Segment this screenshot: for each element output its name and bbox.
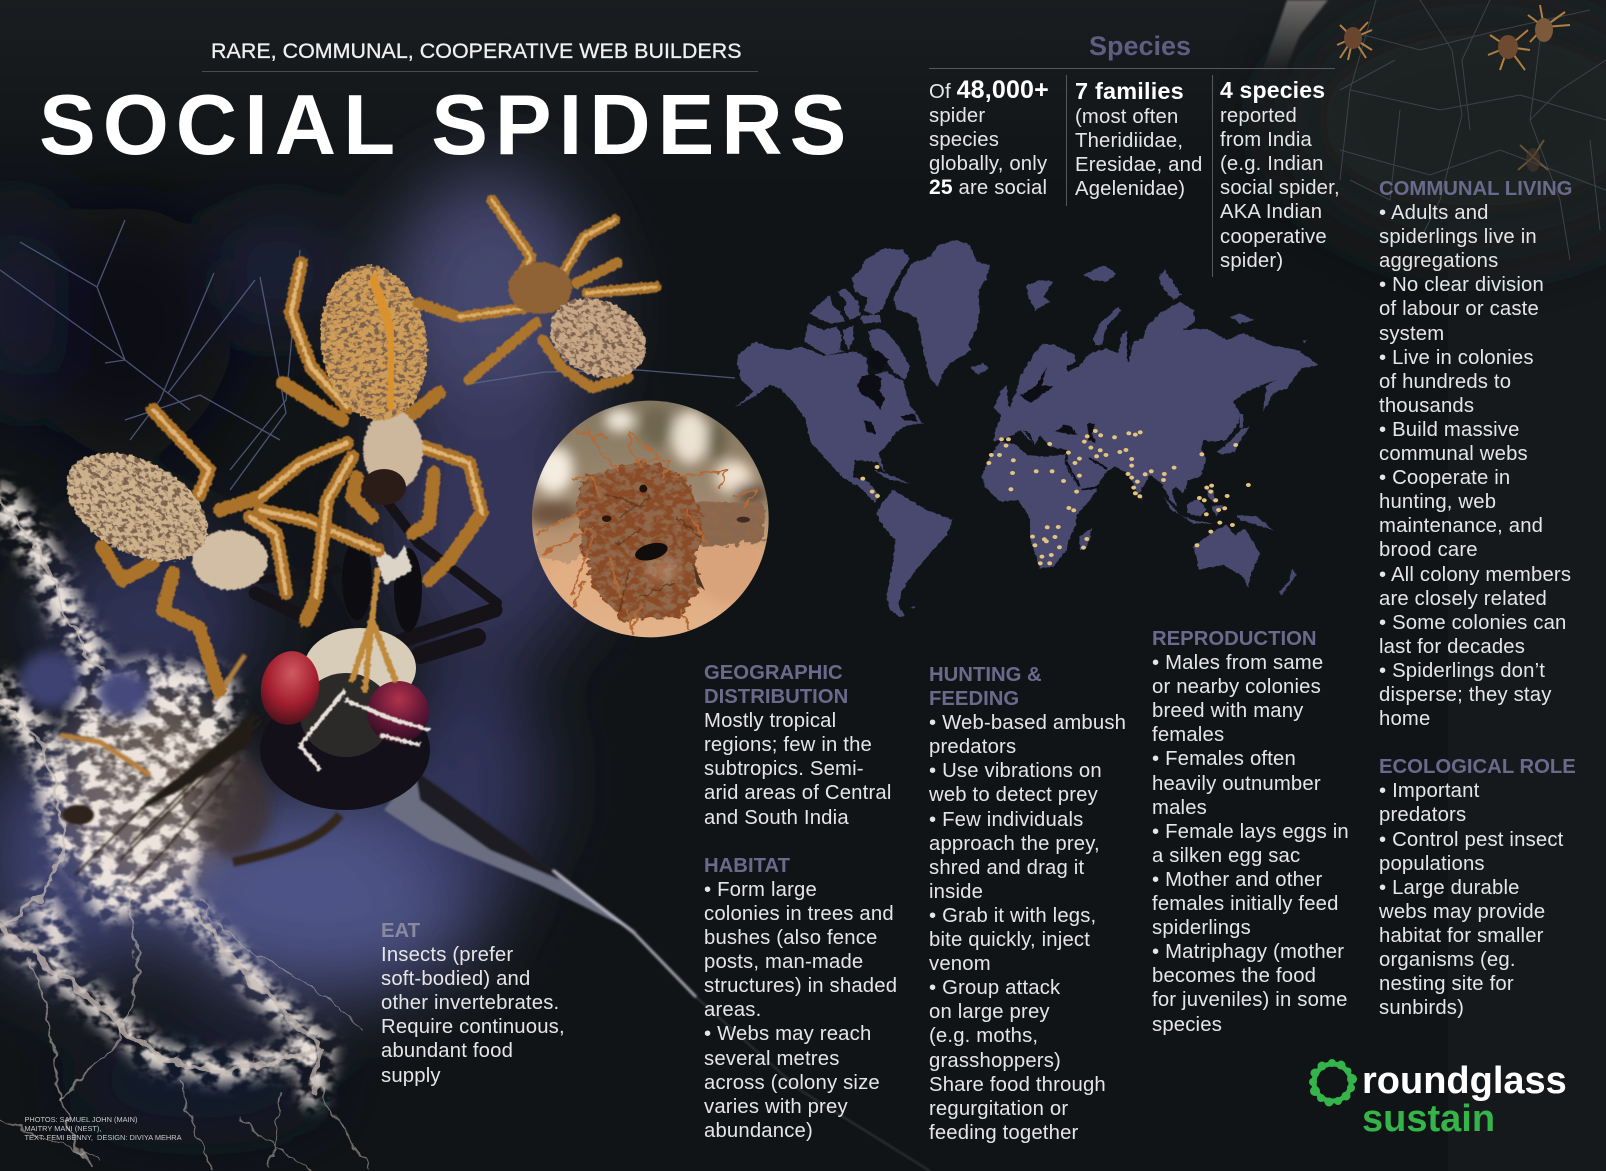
heading: geographic distribution: GEOGRAPHIC DISTRIBUTION <box>704 662 848 708</box>
web threads upper left <box>0 220 735 490</box>
text: global species count: Of 48,000+ spider species globally, only 25 are social <box>929 76 1049 199</box>
text: Indian species: 4 species reported from India (e.g. Indian social spider, AKA Indian cooperative spider) <box>1220 77 1340 272</box>
heading: ecological role: ECOLOGICAL ROLE <box>1379 756 1576 778</box>
panel: eat <box>381 920 565 1087</box>
logo: roundglass sustain <box>1309 1059 1567 1140</box>
text: eat: Insects (prefer soft-bodied) and other invertebrates. Require continuous, abundant food supply <box>381 944 565 1087</box>
heading: hunting and feeding: HUNTING & FEEDING <box>929 664 1042 710</box>
heading: habitat: HABITAT <box>704 855 790 877</box>
occurrence dots <box>860 429 1251 565</box>
heading: species: Species <box>1089 31 1191 61</box>
icon: green ring of dots <box>1309 1059 1357 1106</box>
text: reproduction: • Males from same or nearby colonies breed with many females • Females often heavily outnumber males • Female lays eggs in a silken egg sac • Mother and other females initially feed spiderlings • Matriphagy (mother becomes the food for juveniles) in some species <box>1152 652 1349 1036</box>
landmasses: Eurasia <box>994 265 1318 507</box>
top-right web and small spiders <box>1262 0 1606 260</box>
landmasses: southern continents and islands <box>860 442 1297 617</box>
heading: eat: EAT <box>381 920 420 942</box>
heading: reproduction: REPRODUCTION <box>1152 628 1317 650</box>
panel: communal living and ecological role <box>1379 178 1576 1019</box>
text: communal living: • Adults and spiderlings live in aggregations • No clear division of labour or caste system • Live in colonies of hundreds to thousands • Build massive communal webs • Cooperate in hunting, web maintenance, and brood care • All colony members are closely related • Some colonies can last for decades • Spiderlings don’t disperse; they stay home <box>1379 202 1571 730</box>
text: geographic distribution: Mostly tropical regions; few in the subtropics. Semi- arid areas of Central and South India <box>704 710 892 829</box>
panel: reproduction <box>1152 628 1349 1036</box>
landmasses: Americas and arctic <box>735 240 1012 503</box>
panel: species <box>929 31 1340 277</box>
text: ecological role: • Important predators • Control pest insect populations • Large durable webs may provide habitat for smaller organisms (eg. nesting site for sunbirds) <box>1379 780 1563 1019</box>
text: habitat: • Form large colonies in trees and bushes (also fence posts, man-made structures) in shaded areas. • Webs may reach several metres across (colony size varies with prey abundance) <box>704 879 897 1142</box>
web masses <box>65 690 235 890</box>
heading: communal living: COMMUNAL LIVING <box>1379 178 1572 200</box>
text: families: 7 families (most often Theridiidae, Eresidae, and Agelenidae) <box>1075 78 1202 200</box>
panel: hunting and feeding <box>929 664 1126 1144</box>
prey fly <box>75 503 930 1171</box>
text: hunting and feeding: • Web-based ambush predators • Use vibrations on web to detect prey • Few individuals approach the prey, shred and drag it inside • Grab it with legs, bite quickly, inject venom • Group attack on large prey (e.g. moths, grasshoppers) Share food through regurgitation or feeding together <box>929 712 1126 1144</box>
upper right spider <box>418 200 659 393</box>
credits: PHOTOS: SAMUEL JOHN (MAIN) MAITRY MANI (NEST), TEXT: FEMI BENNY, DESIGN: DIVIYA MEHRA <box>24 1115 182 1142</box>
title: SOCIAL SPIDERS <box>39 78 853 173</box>
left spider <box>48 410 378 690</box>
middle spider <box>260 258 482 620</box>
photo inset: spider nest <box>532 291 1296 638</box>
wordmark: sustain: sustain <box>1362 1098 1495 1140</box>
panel: geographic distribution and habitat <box>704 662 897 1142</box>
wordmark: roundglass: roundglass <box>1362 1060 1567 1102</box>
subtitle: RARE, COMMUNAL, COOPERATIVE WEB BUILDERS <box>211 39 742 63</box>
world map of social spider distribution <box>540 240 1318 617</box>
